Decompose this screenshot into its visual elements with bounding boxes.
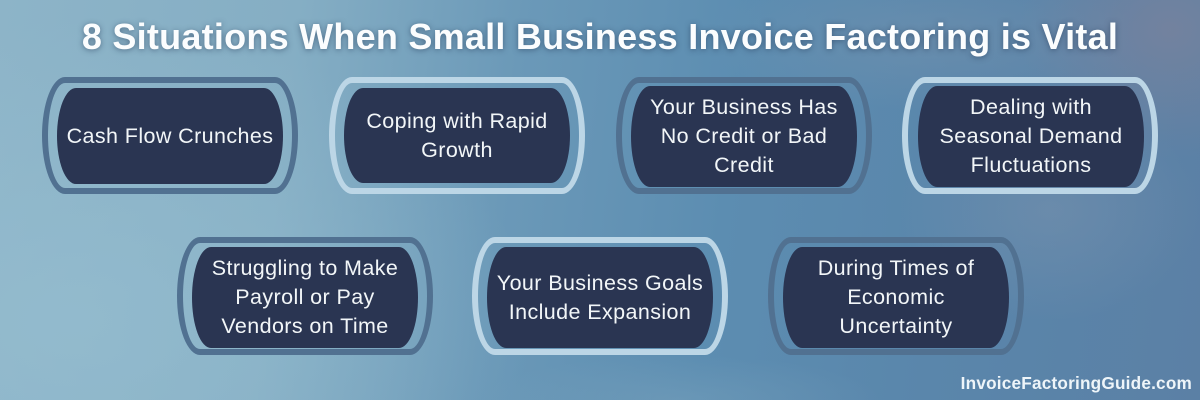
- card: Cash Flow Crunches: [42, 77, 298, 194]
- card: Your Business Has No Credit or Bad Credit: No Credit or Bad: [661, 124, 827, 148]
- card: Coping with Rapid Growth: Growth: [421, 138, 493, 162]
- card: Struggling to Make Payroll or Pay Vendors on Time: Vendors on Time: [221, 314, 389, 338]
- card: Coping with Rapid Growth: Coping with Rapid: [366, 108, 548, 132]
- card: Your Business Has No Credit or Bad Credit: [616, 77, 872, 194]
- card: Struggling to Make Payroll or Pay Vendors on Time: Struggling to Make: [212, 256, 398, 280]
- card: Dealing with Seasonal Demand Fluctuations: Dealing with: [970, 95, 1092, 119]
- card: Dealing with Seasonal Demand Fluctuations: Seasonal Demand: [940, 124, 1122, 148]
- card: Your Business Goals Include Expansion: [472, 237, 728, 355]
- card: Your Business Goals Include Expansion: Include Expansion: [509, 300, 691, 324]
- title: 8 Situations When Small Business Invoice Factoring is Vital: [82, 16, 1118, 57]
- card: Coping with Rapid Growth: [329, 77, 585, 194]
- card: Struggling to Make Payroll or Pay Vendors on Time: [177, 237, 433, 355]
- card: During Times of Economic Uncertainty: During Times of: [818, 256, 974, 280]
- card: Struggling to Make Payroll or Pay Vendors on Time: Payroll or Pay: [235, 285, 375, 309]
- card: Dealing with Seasonal Demand Fluctuations: Fluctuations: [971, 153, 1091, 177]
- card: During Times of Economic Uncertainty: Economic: [847, 285, 945, 309]
- card: Your Business Has No Credit or Bad Credit: Your Business Has: [650, 95, 838, 119]
- card: Your Business Goals Include Expansion: Your Business Goals: [497, 270, 703, 294]
- card: Cash Flow Crunches: Cash Flow Crunches: [67, 124, 273, 148]
- card: Dealing with Seasonal Demand Fluctuations: [902, 77, 1158, 194]
- card: During Times of Economic Uncertainty: [768, 237, 1024, 355]
- website url: InvoiceFactoringGuide.com: [961, 373, 1192, 393]
- card: Your Business Has No Credit or Bad Credit: Credit: [714, 153, 774, 177]
- card: During Times of Economic Uncertainty: Uncertainty: [839, 314, 953, 338]
